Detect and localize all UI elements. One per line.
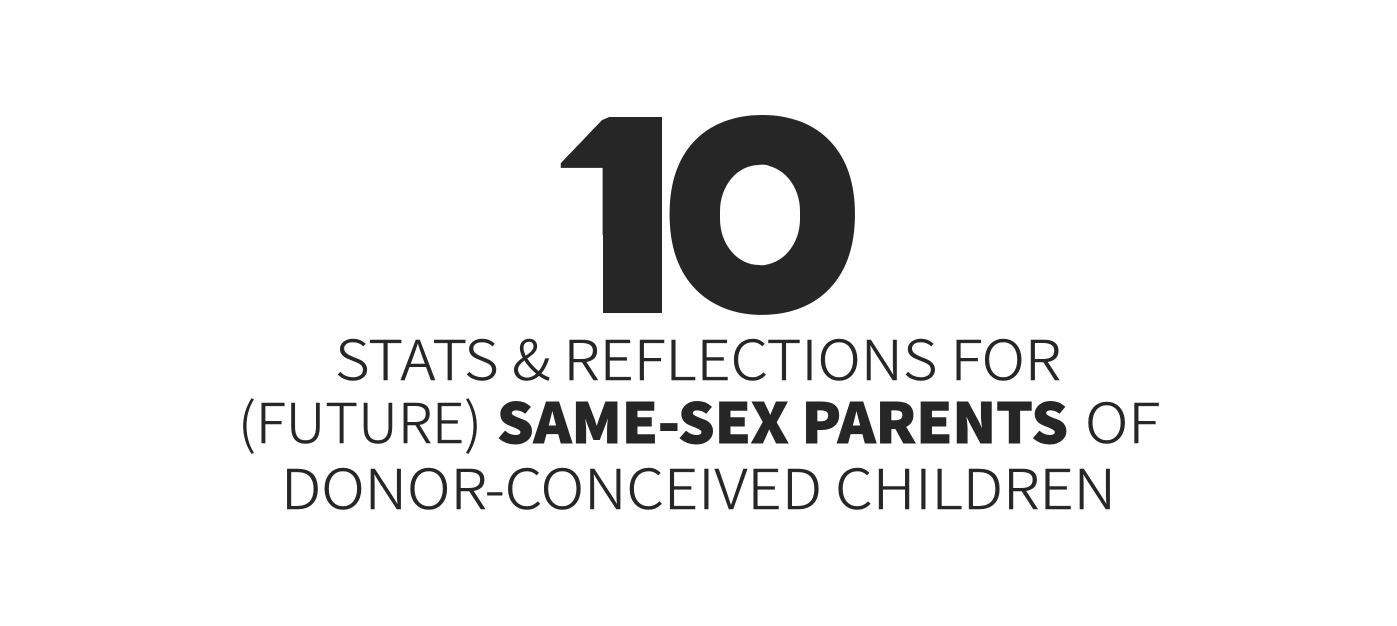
title line 2: SAME-SEX PARENTS bbox=[497, 379, 1068, 459]
title line 3: DONOR-CONCEIVED CHILDREN bbox=[281, 445, 1116, 525]
big number 10: 1 bbox=[535, 0, 721, 392]
big number 10 bbox=[560, 115, 855, 315]
big number 10: 0 bbox=[667, 22, 858, 374]
title line 2: OF bbox=[1085, 379, 1160, 459]
title line 2: (FUTURE) bbox=[238, 379, 482, 459]
title text block bbox=[238, 316, 1160, 525]
title line 1: STATS & REFLECTIONS FOR bbox=[335, 316, 1061, 396]
title line 2 bbox=[238, 379, 1160, 459]
